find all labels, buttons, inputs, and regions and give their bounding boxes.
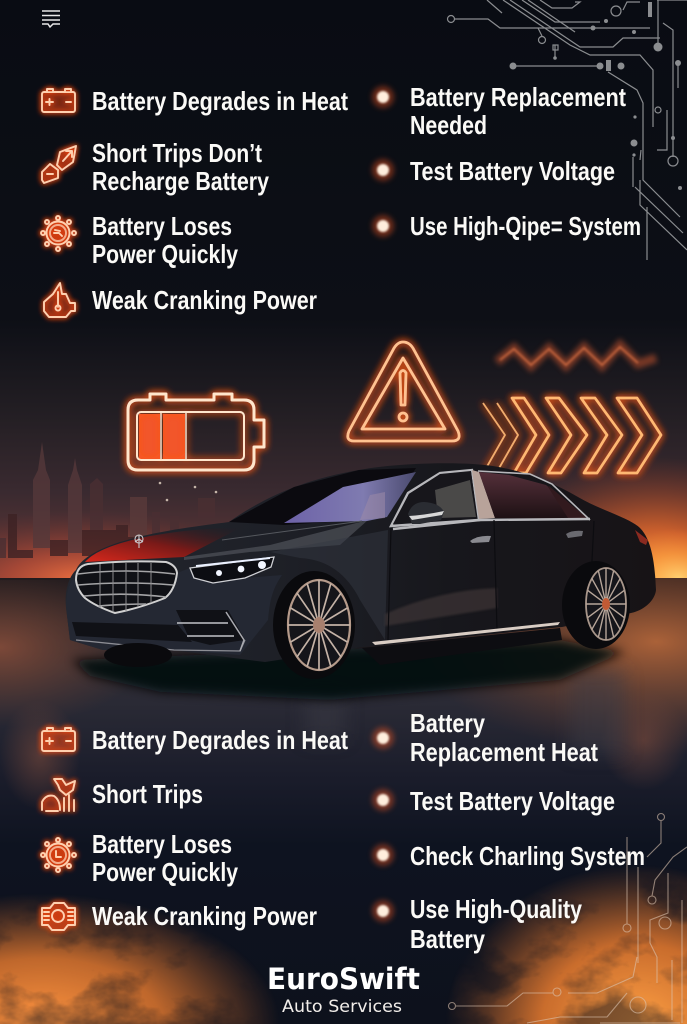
text: battery loses power quickly: Power Quickly — [92, 857, 238, 887]
bullet — [372, 727, 394, 749]
text: battery loses power quickly — [92, 829, 238, 887]
icon: low battery neon — [128, 394, 264, 470]
mercedes star — [135, 535, 143, 548]
text: battery degrades in heat: Battery Degrades in Heat — [92, 725, 348, 755]
bullet — [372, 900, 394, 922]
car shadow — [72, 640, 625, 700]
menu icon — [42, 11, 60, 27]
text: test battery voltage: Test Battery Voltage — [410, 786, 615, 816]
circuit traces top right — [448, 0, 687, 260]
bullet — [372, 86, 394, 108]
text: battery replacement heat: Battery — [410, 708, 485, 738]
panel: bottom right actions — [372, 708, 645, 954]
background upper — [0, 0, 687, 580]
text: battery replacement heat: Replacement Heat — [410, 737, 598, 767]
icon: neon chevrons — [483, 398, 661, 473]
text: test battery voltage: Test Battery Voltage — [410, 156, 615, 186]
side sill chrome — [372, 622, 560, 645]
underbody — [362, 628, 562, 665]
icon: short trips arrow — [42, 146, 76, 183]
text: battery degrades in heat: Battery Degrades in Heat — [92, 86, 348, 116]
text: short trips don't recharge battery — [92, 138, 269, 196]
icon: weak cranking gauge — [44, 283, 75, 317]
icon: gauge gear — [41, 838, 76, 872]
panel: top right actions — [372, 82, 641, 241]
city skyline — [0, 442, 217, 558]
text: battery replacement needed: Battery Replacement — [410, 82, 626, 112]
lower bumper — [72, 610, 245, 651]
text: battery loses power quickly: Power Quickly — [92, 239, 238, 269]
windshield — [229, 468, 416, 525]
text: use high-quality battery: Battery — [410, 924, 485, 954]
side windows — [391, 470, 590, 529]
text: weak cranking power: Weak Cranking Power — [92, 285, 317, 315]
bullet — [372, 215, 394, 237]
brand logo: Auto Services — [282, 997, 402, 1017]
rear wheel — [562, 561, 630, 649]
text: battery loses power quickly — [92, 211, 238, 269]
icon: gauge gear — [41, 216, 76, 251]
text: battery loses power quickly: Battery Loses — [92, 211, 232, 241]
floor — [0, 578, 687, 1024]
grille — [76, 561, 177, 613]
text: short trips don't recharge battery: Recharge Battery — [92, 166, 269, 196]
car body — [66, 463, 656, 662]
text: weak cranking power: Weak Cranking Power — [92, 901, 317, 931]
front fascia — [66, 568, 282, 655]
text: battery replacement needed: Needed — [410, 110, 487, 140]
door highlight — [385, 588, 497, 626]
front wheel — [273, 571, 355, 679]
brand logo: EuroSwift — [267, 962, 420, 996]
mirror — [408, 502, 444, 524]
icon: car battery — [42, 89, 75, 112]
text: battery loses power quickly: Battery Loses — [92, 829, 232, 859]
text: use high-quality battery — [410, 894, 582, 954]
rear light — [635, 530, 648, 545]
car — [66, 463, 656, 700]
text: short trips: Short Trips — [92, 779, 203, 809]
front fender shading — [270, 530, 388, 640]
text: short trips don't recharge battery: Short Trips Don’t — [92, 138, 262, 168]
icon: engine — [42, 903, 75, 930]
bullet — [372, 159, 394, 181]
bullet — [372, 844, 394, 866]
hood with red reflection — [85, 528, 240, 562]
brand logo — [267, 962, 420, 1017]
panel: top left symptoms — [41, 86, 348, 317]
front tyre under bumper — [104, 643, 172, 667]
circuit traces bottom right — [448, 814, 687, 1023]
text: battery replacement needed — [410, 82, 626, 140]
headlight — [190, 557, 274, 583]
bullet — [372, 789, 394, 811]
door lines and handles — [222, 520, 594, 640]
text: battery replacement heat — [410, 708, 598, 767]
panel: bottom left symptoms — [41, 725, 348, 931]
icon: blurred zigzag — [497, 345, 656, 366]
car reflection — [305, 670, 625, 755]
icon: car battery — [42, 728, 75, 751]
icon: warning triangle — [348, 342, 459, 441]
text: use high-quality battery: Use High-Quality — [410, 894, 582, 924]
fire smoke bottom — [0, 820, 687, 1024]
icon: short trips — [42, 779, 75, 811]
